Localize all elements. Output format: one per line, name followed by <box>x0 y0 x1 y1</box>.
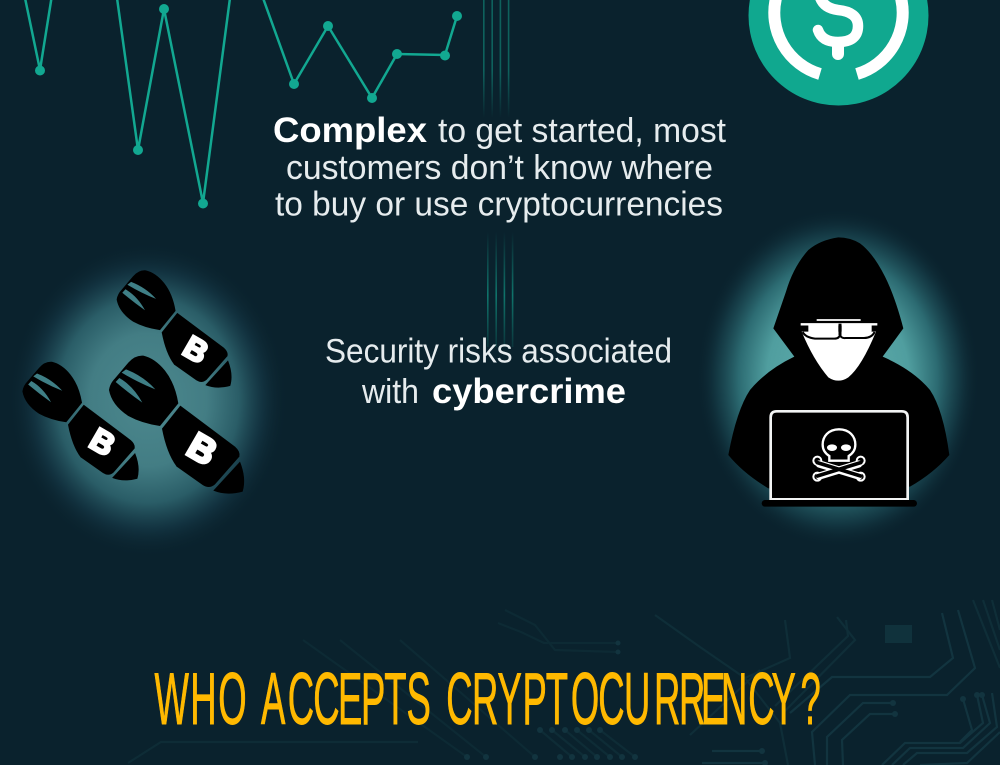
text block: security risks <box>325 332 672 411</box>
bomb: large: B <box>180 425 224 473</box>
bomb: bottom left: B <box>84 421 122 463</box>
glasses <box>801 320 877 339</box>
hooded figure <box>728 237 949 488</box>
bomb: top <box>117 270 232 388</box>
icon: skull and crossbones <box>813 429 865 481</box>
bomb: bottom left <box>22 362 139 480</box>
title: who accepts cryptocurrency: WHO ACCEPTS CRYPTOCURRENCY? <box>154 659 821 740</box>
vertical connector lines, upper <box>483 0 509 118</box>
text block: complex to get started <box>273 111 727 224</box>
bomb: top: B <box>177 329 214 371</box>
bomb: large <box>109 356 244 494</box>
icon: hooded hacker with laptop <box>728 237 949 507</box>
text block: complex to get started: customers don’t know where <box>286 149 713 187</box>
face mask <box>802 332 876 381</box>
text block: security risks: cybercrime <box>432 372 626 411</box>
laptop <box>762 411 917 507</box>
line chart <box>25 0 462 208</box>
glow behind hacker <box>696 208 980 548</box>
circuit board background <box>128 600 1000 765</box>
text block: security risks: with <box>361 373 419 411</box>
glow behind bombs <box>8 242 288 558</box>
icon: USD coin <box>748 0 928 106</box>
text block: complex to get started: Complex <box>273 111 428 150</box>
icon: bombs <box>22 270 244 494</box>
text block: complex to get started: to get started, most <box>438 112 727 150</box>
text block: complex to get started: to buy or use cryptocurrencies <box>275 186 723 224</box>
text block: security risks: Security risks associated <box>325 332 672 370</box>
vertical connector lines, lower <box>487 232 513 347</box>
